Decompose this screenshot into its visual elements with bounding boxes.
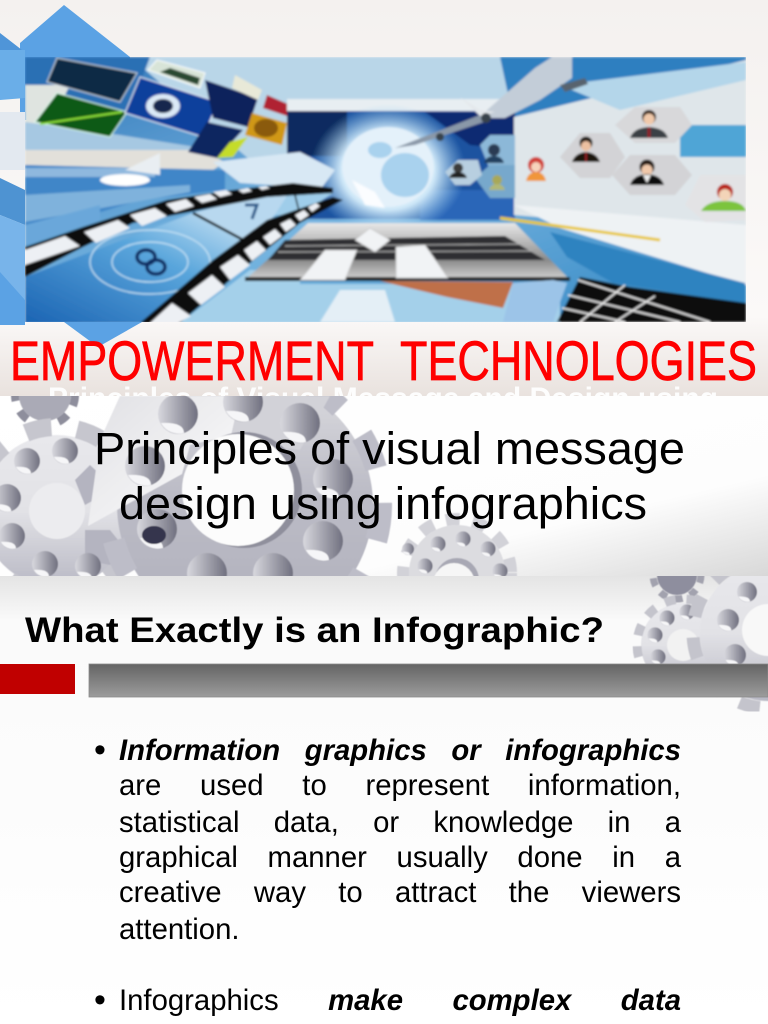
red accent block xyxy=(0,664,75,694)
person hexagons xyxy=(615,107,692,143)
bullet 1: Information graphics or infographics xyxy=(119,734,681,767)
blue lower right swoosh xyxy=(550,232,746,303)
slide 2 background xyxy=(0,396,768,576)
bullet 1: are used to represent information, xyxy=(119,769,681,802)
bullet 1: statistical data, or knowledge in a xyxy=(119,806,681,839)
left binary bands xyxy=(25,121,194,151)
small top-left gear xyxy=(10,396,80,426)
left gear xyxy=(0,418,122,576)
lower light-blue desk xyxy=(180,270,560,323)
photo tiles xyxy=(47,58,137,102)
sky and top rays xyxy=(144,57,508,159)
small right gear xyxy=(396,512,518,576)
slide 2 title: Principles of visual message xyxy=(94,423,685,474)
gears artwork slide 3 xyxy=(632,576,768,712)
people icons xyxy=(449,110,746,211)
envelopes xyxy=(300,228,448,280)
title: Empowerment Technologies xyxy=(10,329,757,392)
faded subtitle cut off by next slide: Principles of Visual Message and Design using xyxy=(48,382,718,415)
body text xyxy=(94,731,682,1019)
heading: What Exactly is an Infographic?: What Exactly is an Infographic? xyxy=(25,611,604,650)
bullet 2: • xyxy=(94,981,106,1019)
upper film strip xyxy=(25,183,333,277)
ship and glow left of globe xyxy=(213,152,335,190)
film frames xyxy=(25,213,247,323)
bullet 1: creative way to attract the viewers xyxy=(119,876,681,909)
big centre gear xyxy=(88,396,392,576)
laptop frame and screen xyxy=(287,99,512,111)
globe blotches xyxy=(368,142,429,197)
airplane xyxy=(395,57,588,148)
bullet 1 xyxy=(94,731,682,946)
slide 2 title xyxy=(94,423,685,529)
laptop keyboard xyxy=(245,223,570,280)
hand and sleeve xyxy=(380,281,513,308)
slide 3 background xyxy=(0,576,768,1024)
black music keys xyxy=(557,277,746,322)
bullet 2: Infographics make complex data xyxy=(119,984,681,1017)
bullet 1: attention. xyxy=(119,913,240,946)
slide 1 background xyxy=(0,0,768,396)
frame numbers xyxy=(90,230,210,294)
photo: digital media montage xyxy=(25,57,746,323)
lower film strip xyxy=(140,197,343,323)
bullet 1: • xyxy=(94,731,106,769)
grey title bar xyxy=(89,664,768,697)
gears artwork slide 2 xyxy=(0,396,518,576)
title: Empowerment Technologies: EMPOWERMENT xyxy=(10,329,374,392)
bullet 1: graphical manner usually done in a xyxy=(119,841,681,874)
right white panel xyxy=(514,60,746,235)
decorative blue diamonds behind photo xyxy=(0,5,142,347)
slide 2 title: design using infographics xyxy=(119,478,647,529)
